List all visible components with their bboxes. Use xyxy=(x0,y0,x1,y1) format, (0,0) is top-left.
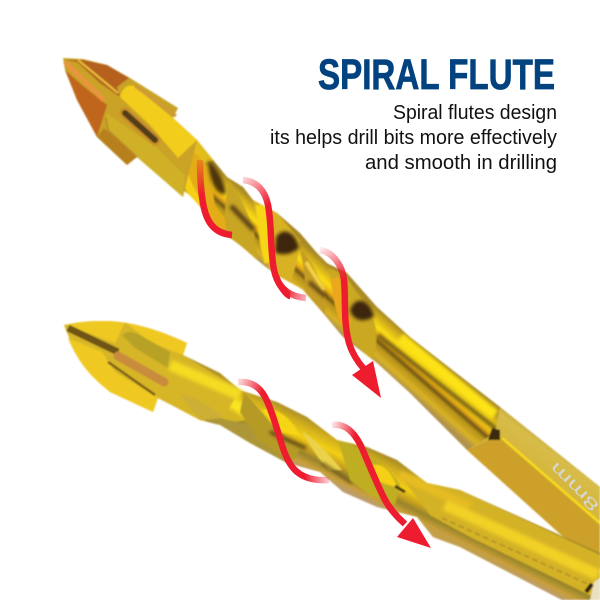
description line 2: its helps drill bits more effectively xyxy=(270,127,557,149)
lower land xyxy=(106,113,185,197)
bottom bit head xyxy=(64,321,240,420)
top bit head xyxy=(63,58,197,197)
lower facet xyxy=(68,338,158,412)
arrow 2 xyxy=(243,180,290,296)
description line 3: and smooth in drilling xyxy=(365,152,557,174)
lower cutting facet xyxy=(65,70,107,137)
lower wing xyxy=(97,128,137,165)
arrow head: top bit xyxy=(352,361,381,398)
description xyxy=(270,102,557,174)
arrow head: bottom bit xyxy=(397,518,431,548)
slot xyxy=(125,113,155,140)
arrow 2 tail xyxy=(276,276,306,298)
description line 1: Spiral flutes design xyxy=(393,102,557,124)
top bit hex shank xyxy=(470,408,600,524)
drill bit: bottom xyxy=(64,321,600,600)
centre groove xyxy=(68,328,118,352)
arrow 4 tail xyxy=(282,445,329,480)
slot xyxy=(118,356,164,382)
arrow 1 xyxy=(200,160,232,235)
arrow 3 xyxy=(320,250,364,369)
upper cutting facet xyxy=(65,60,129,97)
arrows: top bit xyxy=(200,160,364,369)
arrow 5 xyxy=(332,425,405,524)
drill bit: top xyxy=(63,58,600,575)
upper facet xyxy=(66,321,187,355)
bottom bit shaft xyxy=(158,355,600,600)
arrow 4 xyxy=(238,382,282,445)
top bit shaft xyxy=(137,118,600,570)
arrows: bottom bit xyxy=(238,382,405,524)
upper wing xyxy=(120,85,197,158)
